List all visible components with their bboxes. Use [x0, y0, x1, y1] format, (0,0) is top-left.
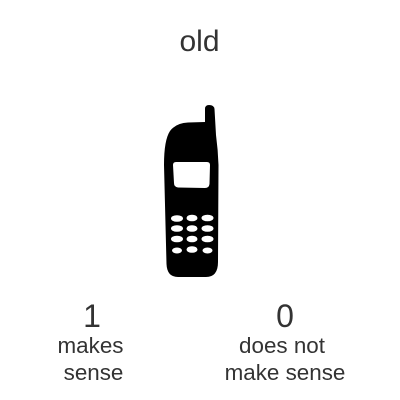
phone screen	[173, 162, 210, 188]
number 0: 0	[276, 298, 294, 334]
label: does not: does not	[239, 333, 326, 358]
number 1: 1	[83, 298, 101, 334]
label: makes: makes	[58, 333, 123, 358]
label: sense: sense	[64, 360, 123, 385]
label: make sense: make sense	[225, 360, 345, 385]
left option: makes sense	[58, 298, 123, 385]
phone body with antenna	[164, 105, 218, 277]
phone keypad	[171, 215, 214, 254]
title: old: old	[179, 25, 220, 58]
right option: does not make sense	[225, 298, 345, 385]
icon: mobile phone	[164, 105, 218, 277]
